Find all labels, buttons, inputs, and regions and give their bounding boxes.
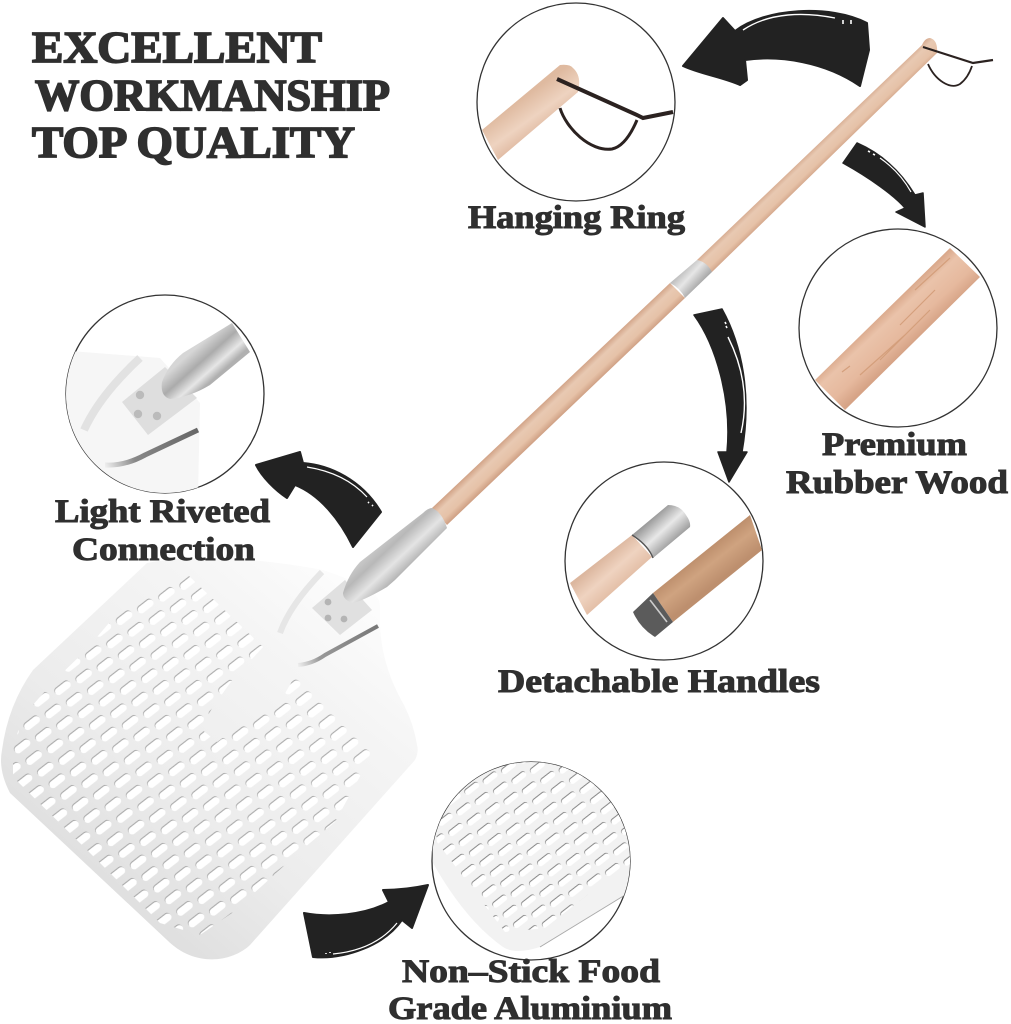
detached handle close-up (570, 505, 762, 637)
label: hanging ring: Hanging Ring (468, 200, 686, 236)
arrow: to non-stick panel (304, 885, 428, 957)
hanging ring close-up (482, 65, 673, 160)
label: premium rubber wood: Premium (822, 427, 967, 463)
panel: rubber wood (799, 229, 997, 427)
panel: riveted connection (60, 295, 264, 495)
pizza peel blade (1, 558, 418, 959)
rivet plate (312, 580, 372, 635)
handle: silver joint (670, 260, 712, 298)
wood close-up (815, 248, 980, 410)
title: EXCELLENT (32, 23, 322, 72)
riveted connection close-up (60, 323, 250, 495)
title: WORKMANSHIP (35, 71, 390, 120)
panel: hanging ring (477, 3, 675, 201)
label: non-stick food grade aluminium (388, 954, 672, 1024)
perforated surface close-up (430, 760, 640, 951)
label: light riveted connection (55, 494, 270, 568)
perforation slots (13, 575, 373, 935)
panel: detachable handles (565, 462, 763, 660)
hanging cord (923, 47, 993, 86)
title (32, 23, 390, 167)
arrow: to detachable handles (694, 309, 747, 482)
handle: lower wood (432, 283, 685, 525)
blade neck stripe and groove (280, 572, 378, 665)
label: premium rubber wood: Rubber Wood (786, 465, 1008, 501)
label: non-stick food grade aluminium: Non–Stick Food (402, 954, 660, 990)
arrow: to hanging ring (683, 11, 869, 86)
panel: non-stick aluminium (430, 760, 640, 960)
label: premium rubber wood (786, 427, 1008, 501)
handle: upper wood (697, 38, 937, 272)
label: light riveted connection: Light Riveted (55, 494, 270, 530)
arrow: to rubber wood (843, 143, 925, 227)
label: detachable handles: Detachable Handles (498, 664, 820, 700)
handle: silver ferrule (343, 508, 447, 603)
title: TOP QUALITY (32, 118, 355, 167)
label: light riveted connection: Connection (72, 532, 255, 568)
arrow: to riveted connection (256, 452, 381, 547)
